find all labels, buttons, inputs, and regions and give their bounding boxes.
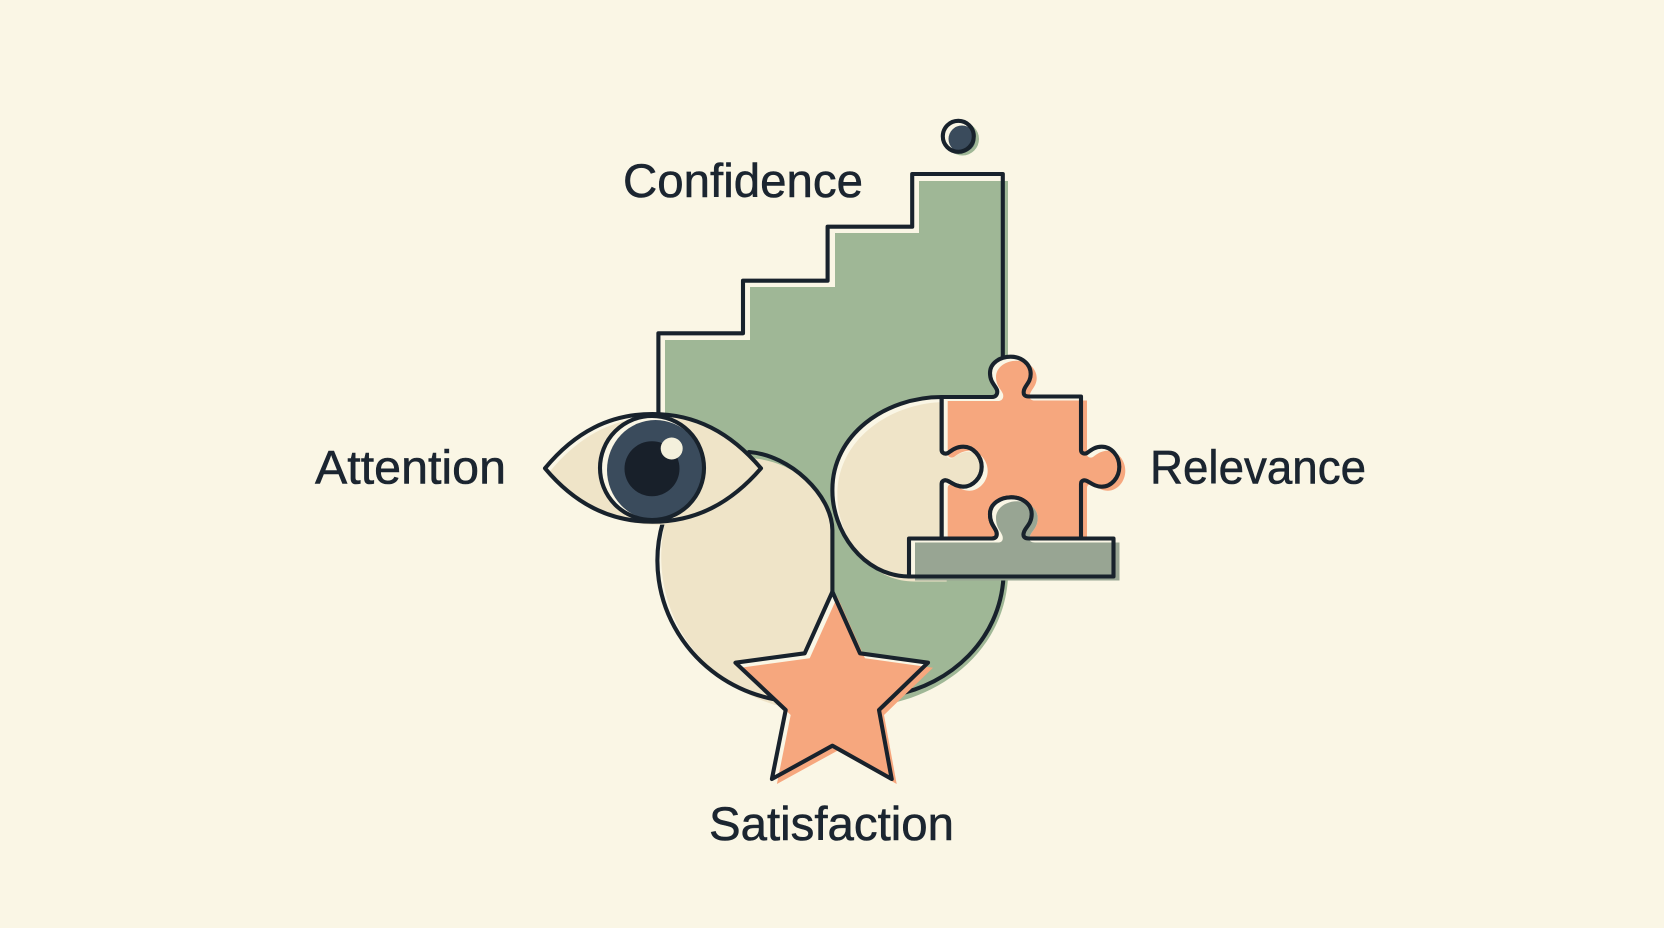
label: Attention: Attention — [315, 440, 506, 494]
label: Confidence: Confidence — [623, 154, 863, 207]
label: Satisfaction: Satisfaction — [709, 797, 954, 850]
right beige puzzle half — [832, 397, 987, 582]
staircase and lower bowl: green body — [658, 174, 1008, 720]
puzzle base — [909, 497, 1120, 580]
icon: eye — [545, 414, 766, 525]
label: Relevance: Relevance — [1150, 440, 1366, 494]
icon: star — [736, 592, 933, 784]
left beige rounded form — [657, 452, 832, 705]
icon: dot on top of stairs — [942, 120, 979, 156]
icon: puzzle piece — [942, 357, 1125, 542]
